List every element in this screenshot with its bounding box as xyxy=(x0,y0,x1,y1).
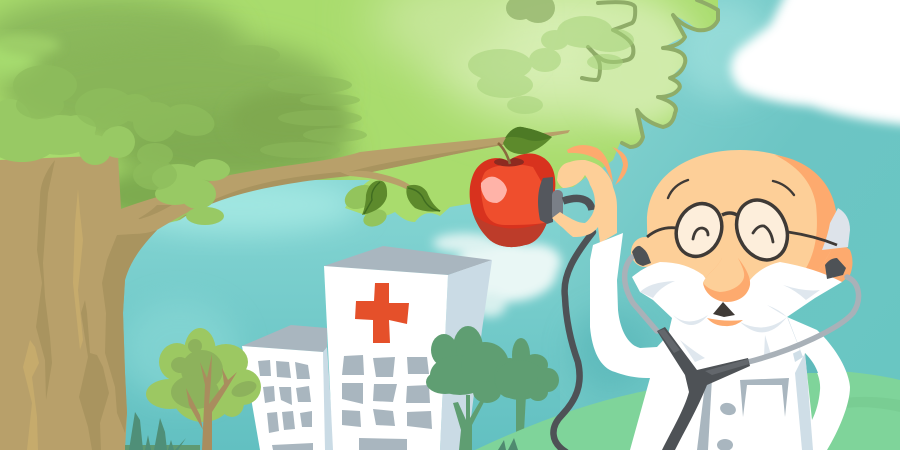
branch with side twig xyxy=(121,130,570,250)
right ear xyxy=(805,244,852,282)
coat details: shading, placket, pocket, buttons, side gap xyxy=(697,318,820,450)
cloud: behind hospital xyxy=(433,233,561,317)
doctor's raised hand xyxy=(552,160,617,243)
cloud: top right xyxy=(731,0,900,126)
beard and moustache xyxy=(632,262,842,368)
stethoscope Y-junction xyxy=(657,327,750,450)
doctor's white coat and raised arm xyxy=(590,233,850,450)
left ear xyxy=(631,237,659,267)
eyebrows xyxy=(668,180,794,198)
small tree, left of hospital xyxy=(146,328,261,450)
hospital: small building xyxy=(242,325,334,450)
leaves on twig xyxy=(341,180,441,230)
nose xyxy=(703,258,750,302)
stethoscope headset tubes xyxy=(625,257,859,362)
tree canopy foliage xyxy=(0,0,718,223)
orange fingers behind hand xyxy=(567,145,628,185)
white side hair xyxy=(822,208,850,250)
stethoscope earpieces xyxy=(632,246,846,279)
glasses and smiling eyes xyxy=(647,192,837,268)
long stethoscope tube xyxy=(553,232,593,450)
hospital red cross xyxy=(355,283,409,343)
canopy scalloped outline xyxy=(582,0,718,147)
grassy hill xyxy=(475,371,900,450)
head xyxy=(647,150,837,290)
canopy darker clumps xyxy=(13,65,218,190)
hospital: main building xyxy=(324,246,492,450)
apple xyxy=(470,154,556,248)
stethoscope chest piece on apple xyxy=(538,177,592,224)
canopy lower clumps xyxy=(0,99,230,225)
apple stem and leaf xyxy=(498,127,552,164)
green trees, right of hospital xyxy=(426,326,559,450)
mouth xyxy=(707,302,743,326)
tree trunk xyxy=(0,155,157,450)
grass tufts xyxy=(125,412,518,450)
canopy top leaf clumps xyxy=(468,0,634,114)
